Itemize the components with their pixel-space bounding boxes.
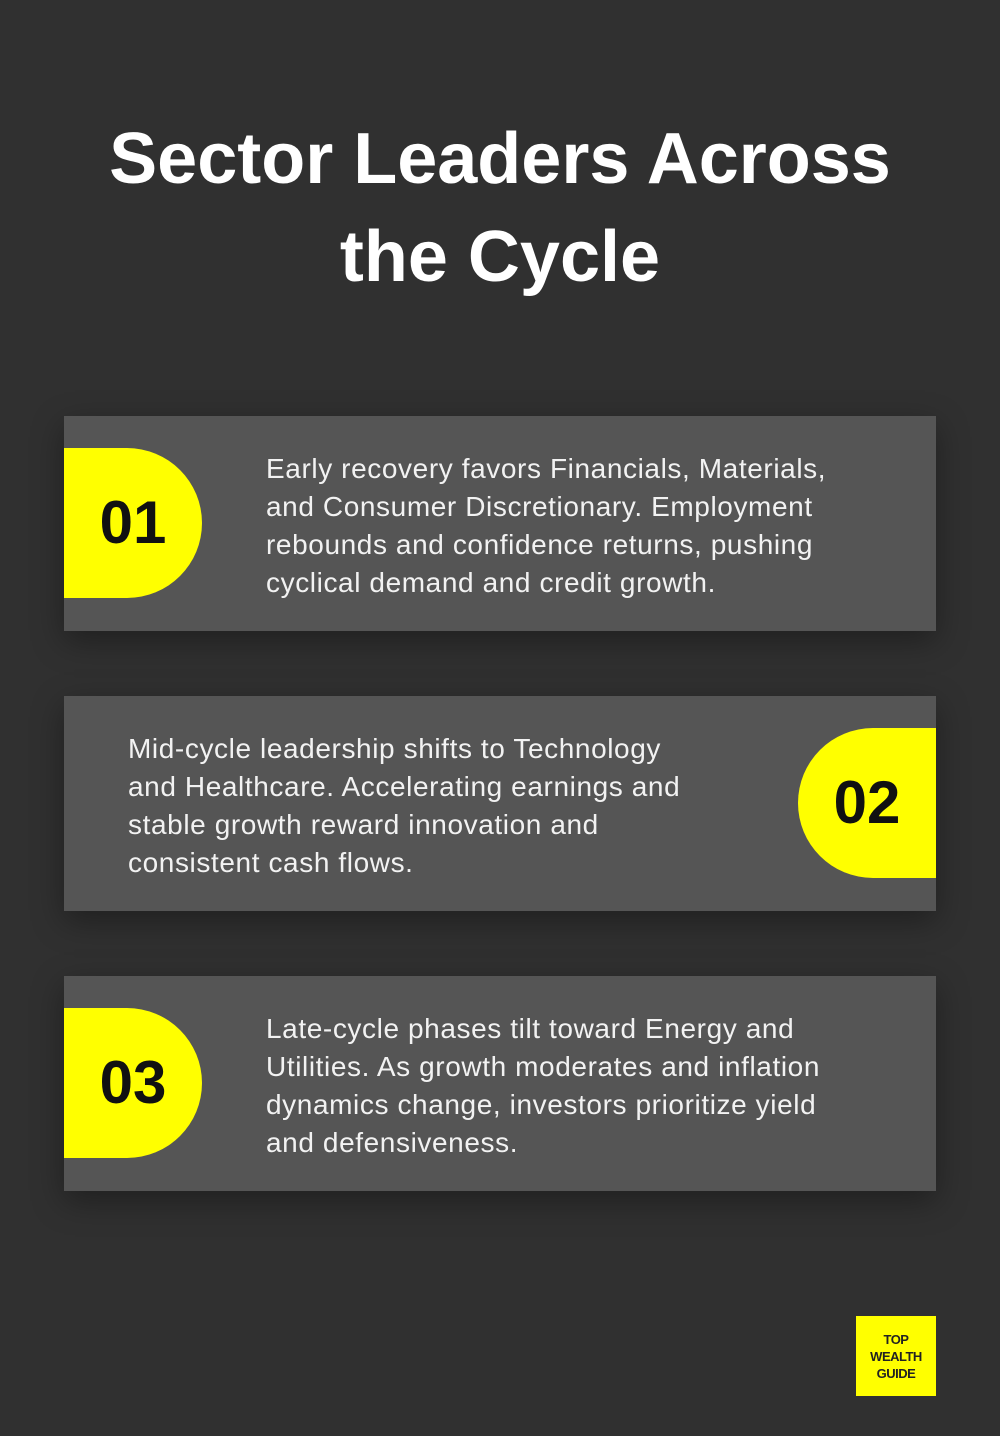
badge 03: 03 [100, 1049, 166, 1116]
text 01: rebounds and confidence returns, pushing [266, 529, 813, 560]
badge 02: 02 [834, 769, 900, 836]
text 02: consistent cash flows. [128, 847, 414, 878]
badge 03 [64, 1008, 202, 1158]
logo: WEALTH [870, 1348, 922, 1364]
text 02: stable growth reward innovation and [128, 809, 599, 840]
title [109, 119, 891, 297]
title: Sector Leaders Across [109, 119, 891, 199]
panel: card 03 [64, 976, 936, 1191]
text 02: and Healthcare. Accelerating earnings and [128, 771, 680, 802]
text 03: Utilities. As growth moderates and inflation [266, 1051, 820, 1082]
text 03 [266, 1013, 820, 1158]
text 02: Mid-cycle leadership shifts to Technology [128, 733, 661, 764]
logo: TOP [883, 1332, 908, 1346]
logo [856, 1316, 936, 1396]
logo: GUIDE [877, 1366, 915, 1380]
text 01: and Consumer Discretionary. Employment [266, 491, 813, 522]
badge 01: 01 [100, 489, 166, 556]
text 02 [128, 733, 680, 878]
text 03: and defensiveness. [266, 1127, 518, 1158]
badge 01 [64, 448, 202, 598]
badge 02 [798, 728, 936, 878]
text 03: Late-cycle phases tilt toward Energy and [266, 1013, 794, 1044]
title: the Cycle [340, 217, 660, 297]
panel: card 01 [64, 416, 936, 631]
text 01: cyclical demand and credit growth. [266, 567, 716, 598]
text 01: Early recovery favors Financials, Materials, [266, 453, 826, 484]
text 01 [266, 453, 826, 598]
text 03: dynamics change, investors prioritize yield [266, 1089, 816, 1120]
panel: card 02 [64, 696, 936, 911]
